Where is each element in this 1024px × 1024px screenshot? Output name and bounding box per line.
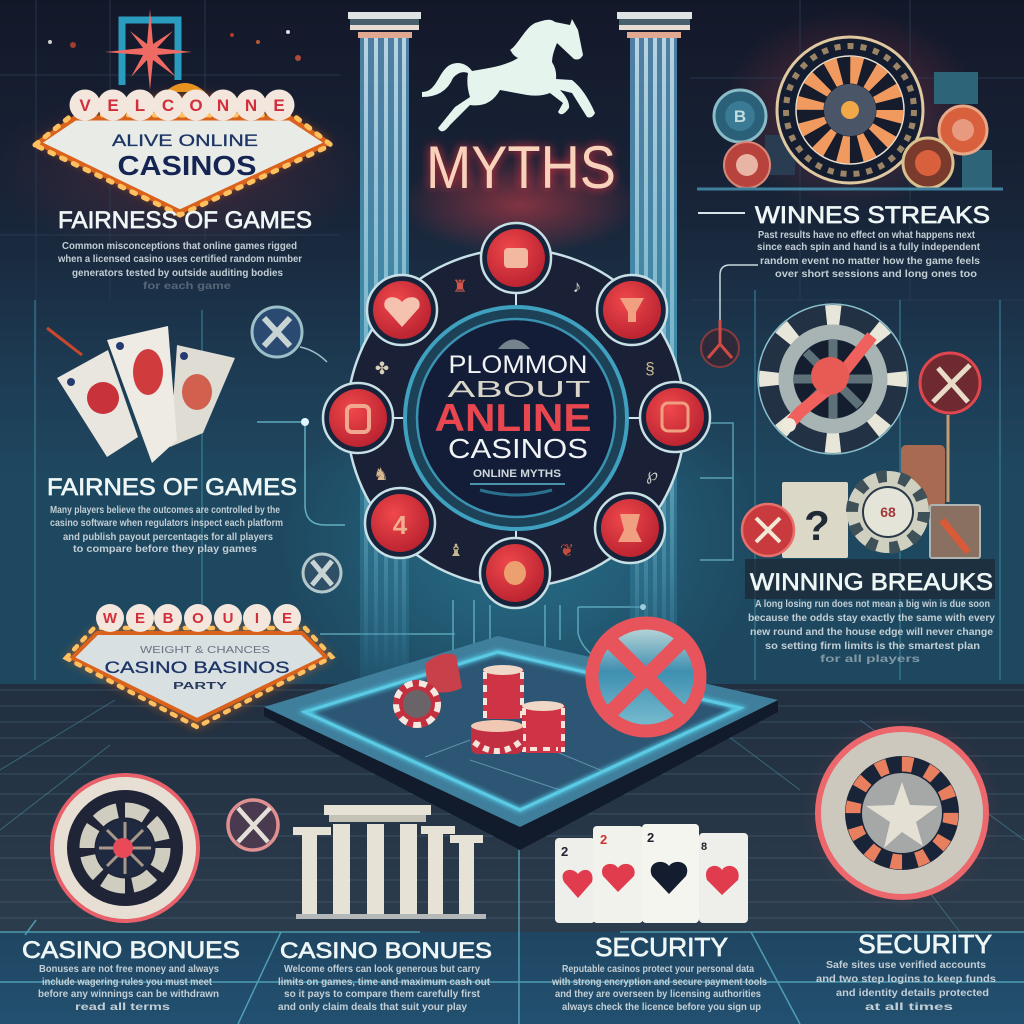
block: security 2: and two step logins to keep funds (816, 973, 996, 985)
sign letters (96, 604, 301, 632)
small ring glyphs: § (645, 359, 655, 378)
small ring glyphs (373, 277, 658, 560)
block: security 1: Reputable casinos protect your personal data (562, 963, 754, 975)
block: security 2: and identity details protected (836, 987, 989, 999)
node: right (640, 382, 710, 452)
node: bottom left: 4 (393, 510, 408, 540)
top-left welcome sign: CASINOS (118, 150, 256, 181)
sign letters: E (135, 610, 145, 627)
block: casino bonues 2: so it pays to compare them carefully first (284, 988, 480, 1000)
sign letters (70, 90, 294, 120)
heading: myths: MYTHS (426, 134, 616, 201)
block: fairness of games top: generators tested by outside auditing bodies (72, 267, 283, 279)
block: winning breauks: A long losing run does not mean a big win is due soon (755, 598, 990, 610)
question card (782, 482, 848, 558)
block: security 2: SECURITY (858, 929, 992, 959)
block: security 1: with strong encryption and secure payment tools (551, 976, 767, 988)
sign letters: O (192, 610, 204, 627)
chip red left (724, 142, 770, 188)
icon: heart cards (555, 824, 748, 923)
small ring glyphs: ♞ (373, 465, 389, 484)
node: bottom right (595, 493, 665, 563)
block: fairness of games top: when a licensed casino uses certified random number (57, 253, 302, 265)
dartboard bottom left (52, 775, 198, 921)
node: bottom left (365, 488, 435, 558)
small ring glyphs: ℘ (646, 465, 658, 484)
block: security 1: and they are overseen by licensing authorities (555, 988, 761, 1000)
left pillar (348, 12, 421, 677)
mid right roulette (758, 304, 908, 454)
chip: 68 (880, 504, 896, 520)
block: fairness of games top: Common misconceptions that online games rigged (62, 240, 297, 252)
block: casino bonues 1: before any winnings can be withdrawn (38, 988, 219, 1000)
bottom-left welcome sign (65, 604, 333, 728)
small ring glyphs: ♪ (573, 277, 581, 296)
node: top (481, 223, 551, 293)
block: fairnes of games left: casino software when regulators inspect each platform (50, 517, 283, 529)
block: fairness of games top: FAIRNESS OF GAMES (58, 207, 312, 234)
bottom-left welcome sign: CASINO BASINOS (104, 658, 290, 677)
connectors (393, 293, 640, 540)
central myth wheel (323, 223, 710, 608)
icon: small red x badge (701, 320, 739, 367)
block: casino bonues 2: Welcome offers can look generous but carry (284, 963, 480, 975)
block: fairness of games top (57, 207, 312, 292)
block: winnes streaks: since each spin and hand is a fully independent (757, 241, 980, 253)
block: winnes streaks: Past results have no effect on what happens next (758, 229, 975, 241)
node: bottom (480, 538, 550, 608)
icon: x badge bottom (228, 800, 278, 850)
block: casino bonues 1: CASINO BONUES (22, 937, 240, 964)
red x icon (742, 504, 794, 556)
roulette wheel (777, 37, 923, 183)
brown cards (901, 445, 980, 558)
block: winnes streaks: over short sessions and long ones too (775, 268, 977, 280)
block: casino bonues 2 (278, 938, 492, 1013)
block: fairnes of games left (47, 474, 297, 555)
centre hub: CASINOS (448, 433, 588, 464)
block: winnes streaks: random event no matter how the game feels (760, 255, 980, 267)
block: fairnes of games left: FAIRNES OF GAMES (47, 474, 297, 501)
chip teal (714, 90, 766, 142)
node: left (323, 383, 393, 453)
block: winning breauks: so setting firm limits is the smartest plan (765, 640, 980, 652)
question card: ? (804, 502, 830, 549)
icon: x badge right (920, 353, 980, 502)
centre hub: ABOUT (448, 376, 590, 402)
icon: heart cards: 2 (600, 832, 607, 847)
sign letters: E (282, 610, 292, 627)
block: security 1: SECURITY (595, 932, 728, 962)
wheel ring (347, 249, 685, 587)
platform with chips (264, 623, 778, 850)
block: winnes streaks: WINNES STREAKS (755, 202, 990, 229)
block: fairness of games top: for each game (143, 280, 231, 292)
icon: heart cards: 2 (561, 844, 568, 859)
sign letters: I (255, 610, 259, 627)
block: security 2: Safe sites use verified accounts (826, 959, 986, 971)
centre hub: ONLINE MYTHS (473, 468, 561, 480)
icon: greek temple (293, 805, 486, 919)
block: casino bonues 2: and only claim deals that suit your play (278, 1001, 467, 1013)
sign letters: N (245, 96, 257, 115)
block: security 1: always check the licence before you sign up (562, 1001, 761, 1013)
chip stacks (393, 654, 565, 754)
small ring glyphs: ✤ (375, 359, 389, 378)
icon: star and frame (105, 9, 192, 90)
bottom roulette right (802, 713, 1002, 913)
block: winning breauks (745, 559, 995, 665)
sign letters: L (135, 96, 145, 115)
icon: heart cards: 2 (647, 830, 654, 845)
sign letters: E (273, 96, 285, 115)
small ring glyphs: ♜ (452, 277, 468, 296)
chip lower right (903, 138, 953, 188)
mid right chip group (742, 445, 980, 558)
sign letters: E (107, 96, 119, 115)
block: security 2: at all times (865, 1001, 953, 1013)
node: top left (367, 275, 437, 345)
block: casino bonues 1: read all terms (75, 1001, 170, 1013)
top right roulette group (697, 37, 1003, 189)
chip right (939, 106, 987, 154)
sign letters: V (79, 96, 91, 115)
block: security 2 (816, 929, 996, 1013)
sign letters: W (103, 610, 118, 627)
block: fairnes of games left: and publish payout percentages for all players (63, 531, 273, 543)
sign board (38, 96, 330, 212)
block: security 1 (551, 932, 767, 1013)
centre hub (405, 307, 627, 529)
sign letters: B (163, 610, 174, 627)
sign text: WEIGHT & CHANCES (140, 645, 270, 656)
sign letters: O (189, 96, 203, 115)
block: winnes streaks (698, 202, 990, 323)
block: winning breauks: WINNING BREAUKS (750, 569, 993, 596)
block: fairnes of games left: Many players believe the outcomes are controlled by the (50, 504, 280, 516)
small ring glyphs: ♝ (448, 541, 464, 560)
icon: playing cards left (47, 326, 235, 463)
right pillar (617, 12, 692, 677)
block: winning breauks: for all players (820, 653, 920, 665)
block: casino bonues 2: limits on games, time and maximum cash out (278, 976, 490, 988)
icon: x badge left (252, 307, 327, 362)
chip stacks behind (765, 72, 992, 188)
sign letters: U (223, 610, 233, 627)
icon: white horse (422, 19, 595, 131)
block: casino bonues 1: include wagering rules you must meet (42, 976, 212, 988)
sign letters: N (217, 96, 229, 115)
bottom-left welcome sign: PARTY (173, 681, 228, 692)
block: casino bonues 2: CASINO BONUES (280, 938, 492, 963)
top-left welcome sign (35, 9, 331, 215)
block: winning breauks: because the odds stay exactly the same with every (748, 612, 995, 624)
sign text: ALIVE ONLINE (112, 131, 258, 150)
chip teal: B (734, 107, 746, 126)
icon: x badge lower left (303, 554, 341, 592)
node: top right (597, 275, 667, 345)
icon: big no sign (592, 623, 700, 731)
block: winning breauks: new round and the house edge will never change (750, 626, 993, 638)
block: fairnes of games left: to compare before they play games (73, 543, 257, 555)
sign letters: C (162, 96, 174, 115)
icon: heart cards: 8 (701, 841, 707, 853)
block: casino bonues 1 (22, 937, 240, 1013)
heading: myths: MYTHS (426, 134, 616, 201)
small ring glyphs: ❦ (560, 541, 574, 560)
centre hub: ANLINE (434, 397, 592, 440)
chip (847, 471, 929, 553)
centre hub: PLOMMON (448, 351, 588, 379)
block: casino bonues 1: Bonuses are not free money and always (39, 963, 219, 975)
